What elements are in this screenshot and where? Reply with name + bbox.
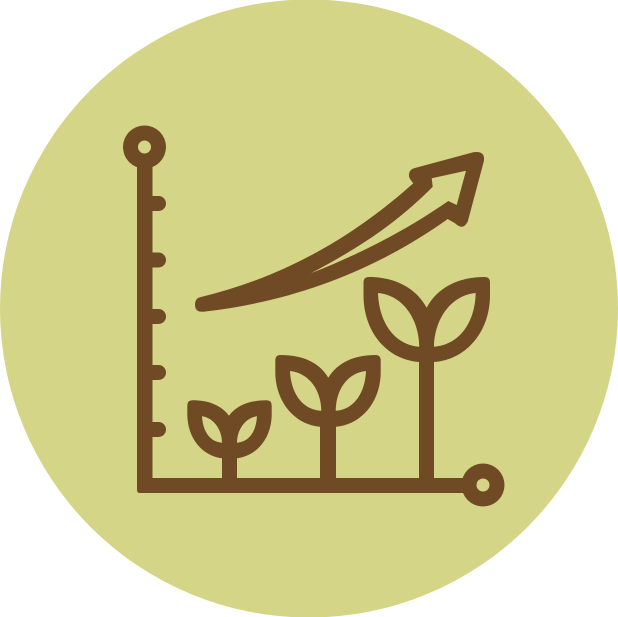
medium plant xyxy=(275,355,381,478)
large plant xyxy=(364,277,490,478)
small plant xyxy=(187,400,272,478)
chart icon xyxy=(123,126,504,506)
axes xyxy=(123,126,504,506)
growth arrow xyxy=(195,152,484,312)
axis ticks xyxy=(150,204,158,430)
